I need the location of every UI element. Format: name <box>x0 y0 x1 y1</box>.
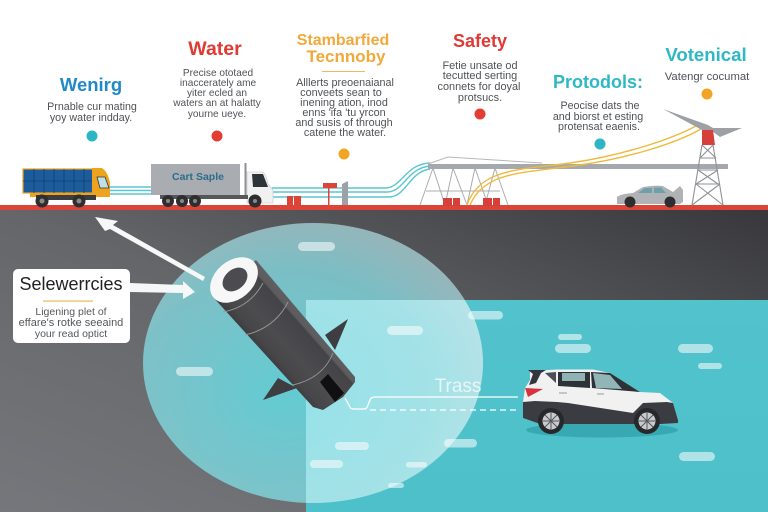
title: Stambarfied Tecnnoby <box>297 32 389 66</box>
text: Stambarfied body: catene the water. <box>304 127 386 139</box>
icon: white SUV <box>523 370 678 438</box>
icon: tube sensor <box>201 248 355 410</box>
callout: Selewerrcies: Ligening plet of <box>35 306 107 318</box>
label: Trass with guide lines <box>345 376 520 410</box>
text: Water body: yourne ueye. <box>188 109 246 120</box>
title: Stambarfied Tecnnoby: Stambarfied <box>297 32 389 49</box>
text: Stambarfied body: conveets sean to <box>300 87 382 99</box>
title: Protodols: Protodols: <box>553 72 643 92</box>
text: Stambarfied body <box>295 71 394 139</box>
text: Water body: waters an at halatty <box>172 98 262 109</box>
teal pipelines <box>108 163 430 197</box>
dot: Protodols <box>594 138 606 150</box>
text: Safety body <box>438 60 520 104</box>
dot: Water <box>212 130 222 142</box>
callout: Selewerrcies <box>13 269 130 343</box>
text: Stambarfied body: Alllerts preoenaianal <box>296 77 394 89</box>
text: Safety body: connets for doyal <box>438 81 520 93</box>
icon: gantry bridge <box>420 157 728 206</box>
text: Safety body: tecutted serting <box>443 70 517 82</box>
text: Water body <box>172 68 262 120</box>
panel: magnified bubble <box>143 223 483 503</box>
icon: wind tower <box>663 109 742 205</box>
icon: grey box truck <box>151 163 273 208</box>
callout: Selewerrcies: your read optict <box>35 328 107 340</box>
text: Water body: yiter ecled an <box>187 88 247 99</box>
text: Stambarfied body: and susis of through <box>295 117 393 129</box>
icon: yellow truck <box>23 168 110 208</box>
text: Stambarfied body: enns 'ifa 'tu yrcon <box>302 107 386 119</box>
icon: roadside sign and barriers <box>287 181 348 206</box>
text: Water body: Precise ototaed <box>183 68 253 79</box>
dot: Safety <box>474 108 486 120</box>
text: Votenical body: Vatengr cocumat <box>665 71 750 83</box>
dot: Votenical <box>702 88 712 100</box>
panel: bubble over water <box>306 300 483 503</box>
label: Trass with guide lines: Trass <box>435 376 481 397</box>
text: Safety body: protsucs. <box>458 92 502 104</box>
title: Votenical: Votenical <box>665 44 747 65</box>
icon: small grey car <box>617 186 683 208</box>
background: sky <box>0 0 768 207</box>
text: Wenirg body <box>47 101 137 124</box>
text: Wenirg body: Prnable cur mating <box>47 101 137 113</box>
callout: Selewerrcies: Selewerrcies <box>19 274 123 294</box>
text: Stambarfied body: inening ation, inod <box>300 97 388 109</box>
panel: water area <box>306 300 768 512</box>
callout: Selewerrcies: effare's rotke seeaind <box>19 317 123 329</box>
text: Water body: inaccerately ame <box>180 78 257 89</box>
dot: Wenirg <box>86 130 98 142</box>
background: underground <box>0 208 768 512</box>
red ground line <box>0 205 768 210</box>
title: Wenirg: Wenirg <box>60 74 122 95</box>
text: Protodols body: and biorst et esting <box>553 111 643 123</box>
text: Protodols body: protensat eaenis. <box>558 121 640 133</box>
text: Protodols body: Peocise dats the <box>560 100 640 112</box>
text: Safety body: Fetie unsate od <box>442 60 518 72</box>
icon: grey box truck: Cart Saple <box>172 171 224 183</box>
water dashes <box>176 242 722 488</box>
title: Safety: Safety <box>453 31 507 51</box>
title: Stambarfied Tecnnoby: Tecnnoby <box>306 47 386 66</box>
dot: Stambarfied <box>338 148 350 160</box>
title: Water: Water <box>188 38 242 60</box>
text: Wenirg body: yoy water indday. <box>50 112 132 124</box>
text: Protodols body <box>553 100 643 133</box>
orange cables <box>467 126 701 205</box>
arrow: up-left <box>95 217 205 281</box>
arrow: callout to tube <box>130 281 195 299</box>
